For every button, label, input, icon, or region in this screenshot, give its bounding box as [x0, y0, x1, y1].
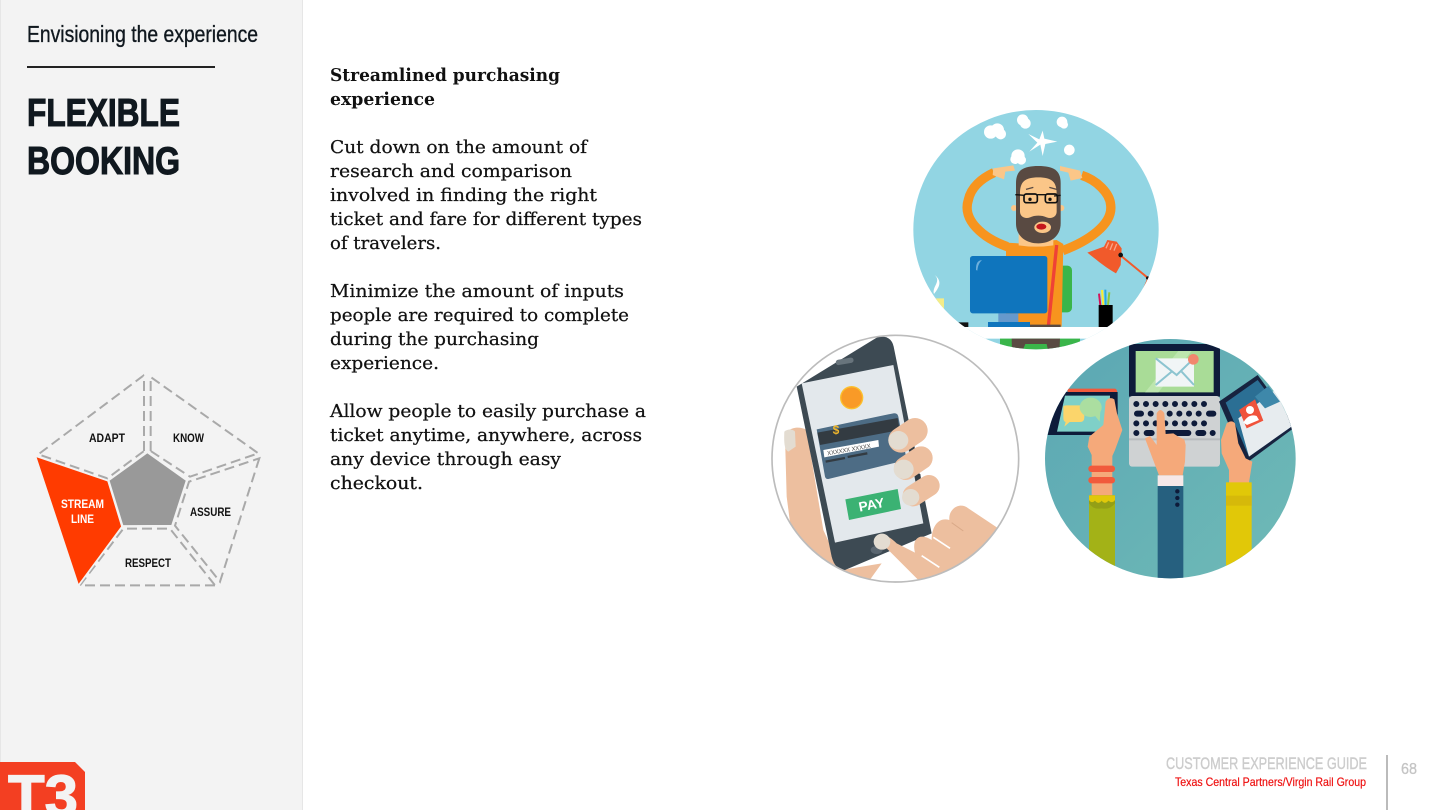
illustration: frustrated man at desk — [913, 110, 1159, 350]
text block: streamlined purchasing: ticket and fare for different types — [330, 209, 642, 230]
text block: streamlined purchasing: during the purchasing — [330, 329, 539, 350]
page number: 68 — [1401, 761, 1417, 778]
text block: streamlined purchasing — [329, 65, 646, 494]
label: assure: ASSURE — [190, 505, 231, 519]
pentagon diagram — [35, 376, 259, 586]
title — [27, 92, 180, 183]
sidebar panel — [0, 0, 303, 810]
text block: streamlined purchasing: Minimize the amount of inputs — [330, 281, 624, 302]
title: FLEXIBLE — [27, 92, 180, 135]
text block: streamlined purchasing: Cut down on the amount of — [330, 137, 588, 158]
label: streamline — [61, 497, 104, 526]
text block: streamlined purchasing: any device through easy — [330, 449, 562, 470]
illustration: hand paying on phone: PAY — [857, 495, 886, 515]
label: respect: RESPECT — [125, 556, 172, 570]
text block: streamlined purchasing: experience. — [330, 353, 439, 374]
illustration: hand paying on phone: XXXXXX XXXXX — [827, 444, 871, 457]
text block: streamlined purchasing: involved in finding the right — [330, 185, 598, 206]
text block: streamlined purchasing: Allow people to easily purchase a — [329, 401, 646, 422]
label: know: KNOW — [173, 431, 205, 445]
text block: streamlined purchasing: ticket anytime, anywhere, across — [330, 425, 642, 446]
label: adapt: ADAPT — [89, 431, 126, 445]
section heading: Envisioning the experience — [27, 21, 258, 47]
footer: client name: Texas Central Partners/Virgin Rail Group — [1175, 775, 1366, 789]
label: streamline: LINE — [71, 512, 94, 526]
text block: streamlined purchasing: Streamlined purchasing — [330, 65, 560, 86]
text block: streamlined purchasing: of travelers. — [330, 233, 441, 254]
footer: guide title: CUSTOMER EXPERIENCE GUIDE — [1166, 754, 1367, 773]
label: streamline: STREAM — [61, 497, 104, 511]
text block: streamlined purchasing: research and comparison — [330, 161, 572, 182]
text block: streamlined purchasing: checkout. — [330, 473, 423, 494]
title: BOOKING — [27, 140, 180, 183]
illustration: hand paying on phone — [772, 335, 1019, 587]
text block: streamlined purchasing: people are required to complete — [330, 305, 629, 326]
illustration: hand paying on phone: $ — [833, 423, 840, 437]
text block: streamlined purchasing: experience — [330, 89, 435, 110]
illustration: hands with devices — [1045, 339, 1296, 578]
